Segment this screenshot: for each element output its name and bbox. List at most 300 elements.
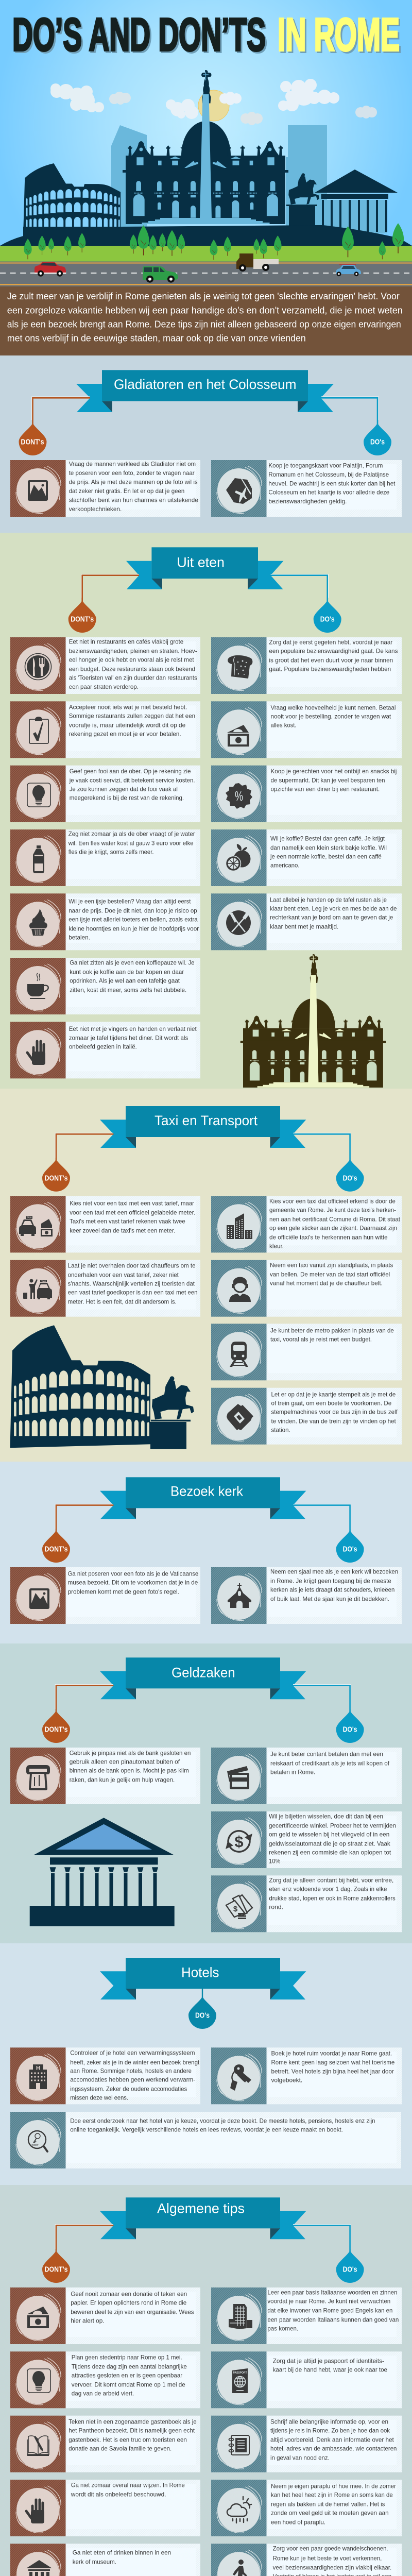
card text (70, 1200, 195, 1234)
card: fixed fare (10, 1196, 200, 1252)
heading ribbon: Geldzaken (171, 1665, 235, 1681)
connectors and drops (68, 574, 341, 633)
heading ribbon: Hotels (181, 1965, 219, 1980)
card text: kleur. (269, 1243, 284, 1250)
card: not ordered (10, 701, 200, 758)
card text: betreft. Veel hotels zijn bijna heel het jaar door (271, 2067, 394, 2075)
card text: donatie aan de Savoia familie te geven. (68, 2445, 171, 2452)
card text: taxi, vooral als je reist met een budget. (270, 1336, 372, 1343)
card text: rekening gezet en moet je er voor betalen. (69, 731, 181, 738)
card text: Neem je eigen paraplu of hoe mee. In de zomer (271, 2482, 396, 2489)
card text: een vast tarief goedkoper is dan een taxi met een (68, 1289, 198, 1296)
card text: Ga niet poseren voor een foto als je de Vaticaanse (68, 1570, 199, 1578)
card text: de supermarkt. Dit kan je veel besparen ten (271, 777, 385, 784)
card text: om geld te wisselen bij het vliegveld of in een (269, 1831, 389, 1838)
card text (269, 1198, 401, 1250)
heading ribbon (100, 1657, 306, 1699)
icon: passport: PASSPORT (233, 2371, 247, 2375)
card text: Romanum en het Colosseum, bij de Palatijnse (268, 471, 389, 478)
card text (271, 768, 397, 793)
connectors and drops: DONT's (71, 615, 94, 624)
card text: Koop je gerechten voor het ontbijt en snacks bij (271, 768, 397, 775)
card text: een populaire bezienswaardigheid gaat. De kans (269, 648, 398, 655)
card text: heeft, zeker als je in de winter een bezoek brengt (70, 2059, 200, 2066)
hill (0, 225, 412, 246)
panel: Hotels (0, 1943, 412, 2185)
card text (267, 2289, 399, 2332)
card: no tip (10, 766, 200, 822)
equestrian statue (286, 173, 319, 227)
card: tickets at Palatine (211, 460, 402, 517)
card text: Wil je biljetten wisselen, doe dit dan bij een (269, 1813, 383, 1820)
icon: dollar exchange: $ (234, 1833, 244, 1851)
card text: hier alert op. (71, 2317, 104, 2325)
card text: zomaar je tafel tijdens het diner. Dit wordt als (69, 1035, 188, 1042)
card text (71, 2482, 185, 2498)
icon: crossed cutlery (226, 910, 251, 935)
connectors and drops: DO's (343, 1174, 357, 1182)
card text: ingssysteem. Zeker de oudere accomodaties (70, 2086, 187, 2093)
card text: keer zoveel dan de taxi's met een meter. (70, 1227, 175, 1234)
card text: Geef geen fooi aan de ober. Op je rekening zie (70, 768, 191, 775)
card text: Controleer of je hotel een verwarmingssysteem (70, 2049, 195, 2057)
card text: Ga niet zitten als je even een koffiepauze wil. Je (70, 959, 195, 967)
card text: rekenen zij een commisie die kan oplopen tot (269, 1849, 391, 1856)
card text: volgeboekt. (271, 2077, 302, 2084)
card text: rond. (269, 1904, 283, 1911)
card text: slachtoffer bent van hun charmes en uitstekende (69, 497, 198, 504)
icon: percent badge: % (235, 788, 243, 804)
card text: zitten, kost dit meer, soms zelfs het dubbele. (70, 987, 186, 994)
card: donations (10, 2287, 200, 2344)
connectors and drops (42, 2225, 364, 2283)
card: Italian words (211, 2287, 402, 2344)
card: book early (211, 2047, 402, 2104)
card: passport (211, 2351, 402, 2408)
heading ribbon: Uit eten (177, 555, 225, 570)
connectors and drops: DO's (343, 1545, 357, 1554)
card text (71, 2291, 194, 2325)
card: ATM (10, 1748, 200, 1804)
card text: wil. Een fles water kost al gauw 3 euro voor elke (68, 840, 194, 847)
card text: gemeente van Rome. Je kunt deze taxi's herken- (269, 1207, 396, 1214)
connectors and drops: DO's (320, 615, 335, 624)
icon: credit cards (227, 1766, 249, 1789)
card text: musea bezoekt. Dit om te voorkomen dat je in de (68, 1579, 198, 1586)
road (0, 262, 412, 286)
card: tourist restaurants (10, 637, 200, 694)
connectors and drops: DONT's (44, 1725, 68, 1734)
card text: Laat je niet overhalen door taxi chauffeurs om te (68, 1262, 196, 1269)
card text: s'nachts. Waarschijnlijk vertellen zij toeristen dat (68, 1280, 195, 1287)
illustration: colosseum with statue (10, 1325, 194, 1449)
icon: city buildings (227, 1213, 252, 1239)
icon: ticket (227, 1404, 253, 1430)
card text: Wil je koffie? Bestel dan geen caffé. Je krijgt (270, 835, 385, 842)
card text: drukke stad, lopen er ook in Rome zakkenrollers (269, 1895, 396, 1902)
card text (68, 1570, 199, 1596)
intro text: Je zult meer van je verblijf in Rome genieten als je weinig tot geen 'slechte ervaringen' hebt. Voor (7, 291, 400, 301)
heading ribbon: Gladiatoren en het Colosseum (114, 377, 297, 392)
icon: lightbulb (27, 2369, 50, 2393)
card text: het Pantheon bezoekt. Dit is namelijk geen echt (68, 2427, 195, 2434)
card text: americano. (270, 862, 300, 869)
card: umbrella (211, 2480, 402, 2536)
card text: Leer een paar basis Italiaanse woorden en zinnen (267, 2289, 397, 2296)
card text (270, 1568, 398, 1603)
card text (271, 2482, 396, 2526)
card text: 10% (269, 1858, 281, 1865)
card text: Rome kun je het beste te voet verkennen, (273, 2555, 382, 2562)
connectors and drops (42, 1133, 364, 1192)
connector and drop (188, 1989, 216, 2029)
icon: coffee cup (27, 973, 48, 999)
colosseum (23, 163, 121, 234)
card text: veel bezienswaardigheden zijn vlakbij elkaar. (273, 2564, 391, 2571)
card: coffee at the bar (10, 958, 200, 1014)
card text: dan namelijk een klein sterk bakje koffie. Wil (270, 844, 387, 852)
card: metro (211, 1324, 402, 1380)
card text (70, 959, 195, 994)
intro text: met ons verblijf in de eeuwige staden, maar ook op die van onze vrienden (7, 333, 306, 343)
card: gladiator photo (10, 460, 200, 517)
card text: stempelmachines voor de bus zijn in de bus zelf (271, 1409, 398, 1416)
card text: een paar woorden Italiaans kunnen dan goed van (267, 2316, 399, 2323)
card text: vervoer. Dit komt omdat Rome op 1 mei de (72, 2381, 185, 2388)
card text: Geef nooit zomaar een donatie of teken een (71, 2291, 187, 2298)
card: pointing (10, 2480, 200, 2536)
icon: banknotes: $ (233, 1905, 238, 1913)
connectors and drops: DO's (343, 2265, 357, 2274)
card text: wordt dit als onbeleefd beschouwd. (71, 2491, 166, 2498)
card text: station. (271, 1427, 290, 1434)
card text: eel honger je ook hebt en vooral als je reist met (69, 656, 194, 664)
illustration: temple (30, 1818, 175, 1926)
card: hands on table (211, 893, 402, 950)
card text (69, 768, 195, 802)
intro text: een zorgeloze vakantie hebben wij een paar handige do's en don't verzameld, die je moet weten (7, 305, 403, 315)
card text (70, 2117, 375, 2133)
card text: nooit voor je bestelling, zonder te vragen wat (271, 713, 391, 720)
card text: in geval van nood enz. (270, 2454, 330, 2462)
card text (268, 462, 396, 505)
card text: zonde om veel geld uit te moeten geven aan (271, 2510, 389, 2517)
card text: Neem een taxi vanuit zijn standplaats, in plaats (270, 1262, 393, 1269)
icon: church (228, 1583, 251, 1608)
card text: voor een taxi met een officieel gelabelde meter. (70, 1209, 195, 1216)
card text: te vinden. Die van de trein zijn te vinden op het (271, 1418, 396, 1425)
connectors and drops (42, 1685, 364, 1743)
card text (70, 2049, 200, 2102)
card text: een ijsje met allerlei toeters en bellen, zoals extra (68, 916, 198, 923)
card: heating (10, 2047, 200, 2104)
card text: klaar bent eten. Leg je vork en mes beide aan de (270, 905, 397, 912)
icon: train (230, 1342, 248, 1367)
card text: Teken niet in een zogenaamde gastenboek als je (68, 2418, 197, 2426)
panel: Bezoek kerk (0, 1462, 412, 1643)
card text (269, 1813, 396, 1865)
illustration: brown basilica (241, 954, 386, 1088)
card text (68, 2418, 197, 2452)
connectors and drops: DONT's (44, 1174, 68, 1182)
icon: dollar exchange (226, 1831, 252, 1852)
card text: Zorg voor een paar goede wandelschoenen. (273, 2545, 388, 2552)
icon: bottle (33, 845, 44, 873)
card text (68, 898, 199, 941)
card text: kan het heel heet zijn in Rome en soms kan de (271, 2492, 393, 2499)
icon: hotel keys (230, 2064, 251, 2091)
card text: tijdens je reis in Rome. Zo ben je hoe dan ook (270, 2427, 390, 2434)
card text (270, 1327, 394, 1343)
card text (273, 2545, 391, 2576)
card text: kerken als je iets draagt dat schouders, knieëen (270, 1586, 394, 1594)
card: supermarket (211, 766, 402, 822)
card: table manners (10, 1022, 200, 1078)
card text: kunt ook je koffie aan de bar kopen en daar (70, 969, 184, 976)
heading ribbon: Algemene tips (157, 2201, 245, 2216)
card: bring a scarf (211, 1567, 402, 1624)
card text: als 'Toeristen val' en zijn duurder dan restaurants (69, 674, 197, 682)
card: pay cash (211, 1748, 402, 1804)
card text: regen als bakken uit de hemel vallen. Het is (271, 2501, 385, 2508)
icon: high-rise (229, 2304, 252, 2329)
card text: gebruik alleen een pinautomaat buiten of (70, 1758, 180, 1766)
card text (270, 835, 387, 869)
card text: opdrinken. Als je wel aan een tafeltje gaat (70, 977, 180, 985)
card: official taxi (211, 1196, 402, 1252)
card text (270, 1751, 390, 1776)
card text: is groot dat het even duurt voor je naar binnen (269, 657, 393, 664)
card text: Ga niet zomaar overal naar wijzen. In Rome (71, 2482, 185, 2489)
card text: Gebruik je pinpas niet als de bank gesloten en (70, 1750, 191, 1757)
card text: Eet niet in restaurants en cafés vlakbij grote (69, 638, 183, 646)
card text (69, 638, 197, 690)
card text: betalen. (68, 934, 90, 941)
card text: Laat allebei je handen op de tafel rusten als je (270, 896, 387, 904)
card: cash only (211, 1875, 402, 1932)
card text (68, 1262, 198, 1306)
icon: clipboard check (29, 717, 48, 743)
card text: Ga niet eten of drinken binnen in een (73, 2549, 171, 2556)
connectors and drops: DO's (370, 438, 385, 447)
icon: green car (143, 266, 178, 283)
card text: of buik laat. Met de sjaal kun je dit bedekken. (270, 1596, 389, 1603)
card text: Accepteer nooit iets wat je niet besteld hebt. (69, 703, 187, 710)
card text (69, 703, 195, 738)
icon: hand (27, 1041, 45, 1065)
icon: operator with headset (229, 1277, 251, 1302)
card text: fles die je krijgt, soms zelfs meer. (68, 849, 153, 856)
connectors and drops: DONT's (21, 438, 44, 447)
card text: Boek je hotel ruim voordat je naar Rome gaat. (271, 2050, 392, 2057)
card text: bezienswaardigheden, pleinen en straten. Hoev- (69, 648, 197, 655)
card text: meegerekend is bij de rest van de rekening. (70, 794, 184, 802)
panel: Gladiatoren en het Colosseum (0, 355, 412, 533)
icon: red car (35, 262, 66, 277)
basilica (123, 70, 288, 224)
grass and trees (0, 223, 412, 262)
card text (270, 1262, 393, 1287)
card text: je een normale koffie, bestel dan een caffé (270, 853, 382, 860)
card text: in Rome. Je krijgt geen toegang bij de meeste (270, 1578, 391, 1585)
icon: notebook (229, 2435, 249, 2455)
card text: Plan geen stedentrip naar Rome op 1 mei. (72, 2354, 182, 2361)
card: no eating in church (10, 2544, 200, 2576)
heading ribbon (126, 547, 283, 589)
card text: Schrijf alle belangrijke informatie op, voor en (270, 2418, 388, 2426)
icon: hand (26, 2500, 44, 2523)
card text (68, 831, 195, 856)
card text: gaat. Populaire bezienswaardigheden hebben (269, 666, 391, 673)
card text: eten enz voldoende voor 1 dag. Zoals in elke (269, 1886, 387, 1893)
card: guestbook (10, 2416, 200, 2472)
icon: magnifier (28, 2131, 47, 2151)
card text: attracties gesloten en er is geen openbaar (72, 2372, 182, 2379)
card text: Je kunt beter contant betalen dan met een (270, 1751, 383, 1758)
card text (72, 2354, 187, 2397)
card text: Zeg niet zomaar ja als de ober vraagt of je water (68, 831, 195, 838)
card text: Taxi's met een vast tarief rekenen vaak twee (70, 1218, 185, 1225)
card text: een paar straten verderop. (69, 683, 139, 690)
card text: pas komen. (267, 2325, 298, 2332)
card text: geldwisselautomaat die je op straat ziet. Vaak (269, 1840, 391, 1848)
card text (273, 2358, 387, 2374)
card text: gecertificeerde winkel. Probeer het te vermijden (269, 1822, 396, 1829)
card text: accomodaties hebben geen werkend verwarm- (70, 2076, 195, 2083)
card text: gastenboek. Het is een truc om toeristen een (68, 2436, 187, 2444)
card text: beweren deel te zijn van een organisatie. Wees (71, 2309, 194, 2316)
connectors and drops (42, 1504, 364, 1563)
card text: dat zeker niet gratis. En let er op dat je geen (69, 487, 184, 495)
card text: de prijs. Als je met deze mannen op de foto wil is (69, 479, 198, 486)
card text (269, 1877, 396, 1911)
connectors and drops: DONT's (44, 2265, 68, 2274)
heading ribbon (100, 1958, 306, 1999)
card text: missen deze wel eens. (70, 2094, 128, 2102)
card text: opzichte van een diner bij een restaurant. (271, 786, 380, 793)
card text (73, 2549, 171, 2566)
icon: taxi and money: TAXI (27, 1216, 31, 1219)
icon: banknotes (226, 1895, 252, 1919)
connectors and drops: DONT's (44, 1545, 68, 1554)
heading ribbon: Taxi en Transport (154, 1113, 258, 1128)
panel: Taxi en Transport (0, 1089, 412, 1462)
icon: truck (236, 253, 279, 272)
card: research hotel (full width) (10, 2112, 401, 2168)
card text: Vraag welke hoeveelheid je kunt nemen. Betaal (271, 704, 396, 711)
card text: Sommige restaurants zullen zeggen dat het een (69, 713, 195, 720)
card text: Zorg dat je alleen contant bij hebt, voor entree, (269, 1877, 393, 1884)
icon: magnifier: www (31, 2144, 39, 2147)
icon: orange (226, 844, 250, 871)
card text: of trein gaat, om een boete te voorkomen. De (271, 1400, 392, 1407)
intro text (7, 291, 403, 343)
card: 1 May (10, 2351, 200, 2408)
icon: cash (27, 2307, 49, 2328)
card text: rechterkant van je bord om aan te geven dat je (270, 914, 393, 921)
heading ribbon (100, 1477, 306, 1519)
card text: vanaf het moment dat je de chauffeur belt. (270, 1280, 383, 1287)
card text: problemen komt met de geen foto's regel. (68, 1588, 179, 1596)
card text (271, 2050, 395, 2084)
card text: bezienswaardigheden geldig. (268, 498, 347, 505)
card text: meter. Het is een feit, dat dit andersom is. (68, 1298, 177, 1306)
card text: onbeleefd gezien in Italië. (69, 1043, 137, 1050)
icon: plate with cutlery (25, 653, 52, 680)
card text (69, 461, 198, 513)
card: water (10, 829, 200, 886)
card text: voordat je naar Rome. Je kunt niet verwachten (267, 2298, 390, 2305)
card text: dat elke inwoner van Rome goed Engels kan en (267, 2307, 392, 2314)
card text: Doe eerst onderzoek naar het hotel van je keuze, voordat je deze boekt. De meeste hotels, pensions, hostels enz zijn (70, 2117, 375, 2125)
card text: Eet niet met je vingers en handen en verlaat niet (69, 1025, 197, 1032)
background buildings (111, 125, 327, 227)
card text: papier. Er lopen oplichters rond in Rome die (71, 2299, 187, 2307)
card: ask quantity (211, 701, 402, 758)
card text: je vaak costi servizi, dit betekent service kosten. (69, 777, 195, 784)
icon: sun (198, 90, 229, 121)
card text: een budget. Deze restaurants staan ook bekend (69, 666, 195, 673)
icon: percent badge (226, 783, 252, 809)
icon: hailing taxi (23, 1279, 52, 1299)
icon: hotel (29, 2064, 47, 2089)
icon: passport (232, 2368, 248, 2393)
card: overpriced fare (10, 1260, 200, 1317)
panel: Geldzaken (0, 1643, 412, 1943)
card: Vatican museum photos (10, 1567, 200, 1624)
card text: Koop je toegangskaart voor Palatijn, Forum (268, 462, 383, 469)
card: coffee (211, 829, 402, 886)
connector and drop: DO's (195, 2011, 210, 2020)
card text: Let er op dat je je kaartje stempelt als je met de (271, 1391, 396, 1398)
card text: raken, dan kun je gelijk om hulp vragen. (70, 1776, 175, 1784)
card text (271, 1391, 398, 1434)
card text: naar de prijs. Doe je dit niet, dan loop je risico op (68, 907, 197, 914)
panel: Algemene tips (0, 2185, 412, 2576)
icon: hotel: H (36, 2065, 40, 2071)
card text: Wil je een ijsje bestellen? Vraag dan altijd eerst (68, 898, 191, 905)
card text: Rome kent geen laag seizoen wat het toerisme (271, 2059, 395, 2066)
card text: Kies niet voor een taxi met een vast tarief, maar (70, 1200, 194, 1207)
card text: van bellen. De meter van de taxi start officiëel (270, 1270, 390, 1278)
icon: taxi and money (19, 1216, 53, 1236)
card text: te poseren voor een foto, zonder te vragen naar (69, 469, 195, 477)
temple (315, 170, 398, 233)
card text: dag van de arbeid viert. (72, 2390, 134, 2397)
card text: Je zou kunnen zeggen dat de fooi vaak al (70, 786, 178, 793)
card text: binnen als de bank open is. Mocht je pas klim (70, 1767, 189, 1774)
card: taxi stand (211, 1260, 402, 1317)
card text: Zorg dat je altijd je paspoort of identiteits- (273, 2358, 384, 2365)
card text: verkooptechnieken. (69, 505, 122, 513)
card text: kaart bij de hand hebt, waar je ook naar toe (273, 2366, 387, 2374)
clouds (50, 79, 377, 125)
icon: toast (228, 655, 252, 679)
card text: alles kost. (271, 722, 297, 729)
icon: blue car (336, 264, 361, 276)
heading ribbon (100, 2197, 306, 2239)
icon: sun and rain cloud (227, 2497, 251, 2523)
card text: een hoed of paraplu. (271, 2519, 325, 2526)
card text: de officiële taxi's te herkennen aan hun witte (269, 1234, 388, 1241)
card text: voorafje is, maar uiteindelijk wordt dit op de (69, 722, 186, 729)
heading ribbon (100, 1106, 306, 1148)
card: exchange money (211, 1811, 402, 1868)
icon: cupcake (29, 909, 47, 936)
card text: Vraag de mannen verkleed als Gladiator niet om (69, 461, 196, 468)
icon: picture (29, 1588, 49, 1609)
icon: picture (28, 480, 48, 501)
